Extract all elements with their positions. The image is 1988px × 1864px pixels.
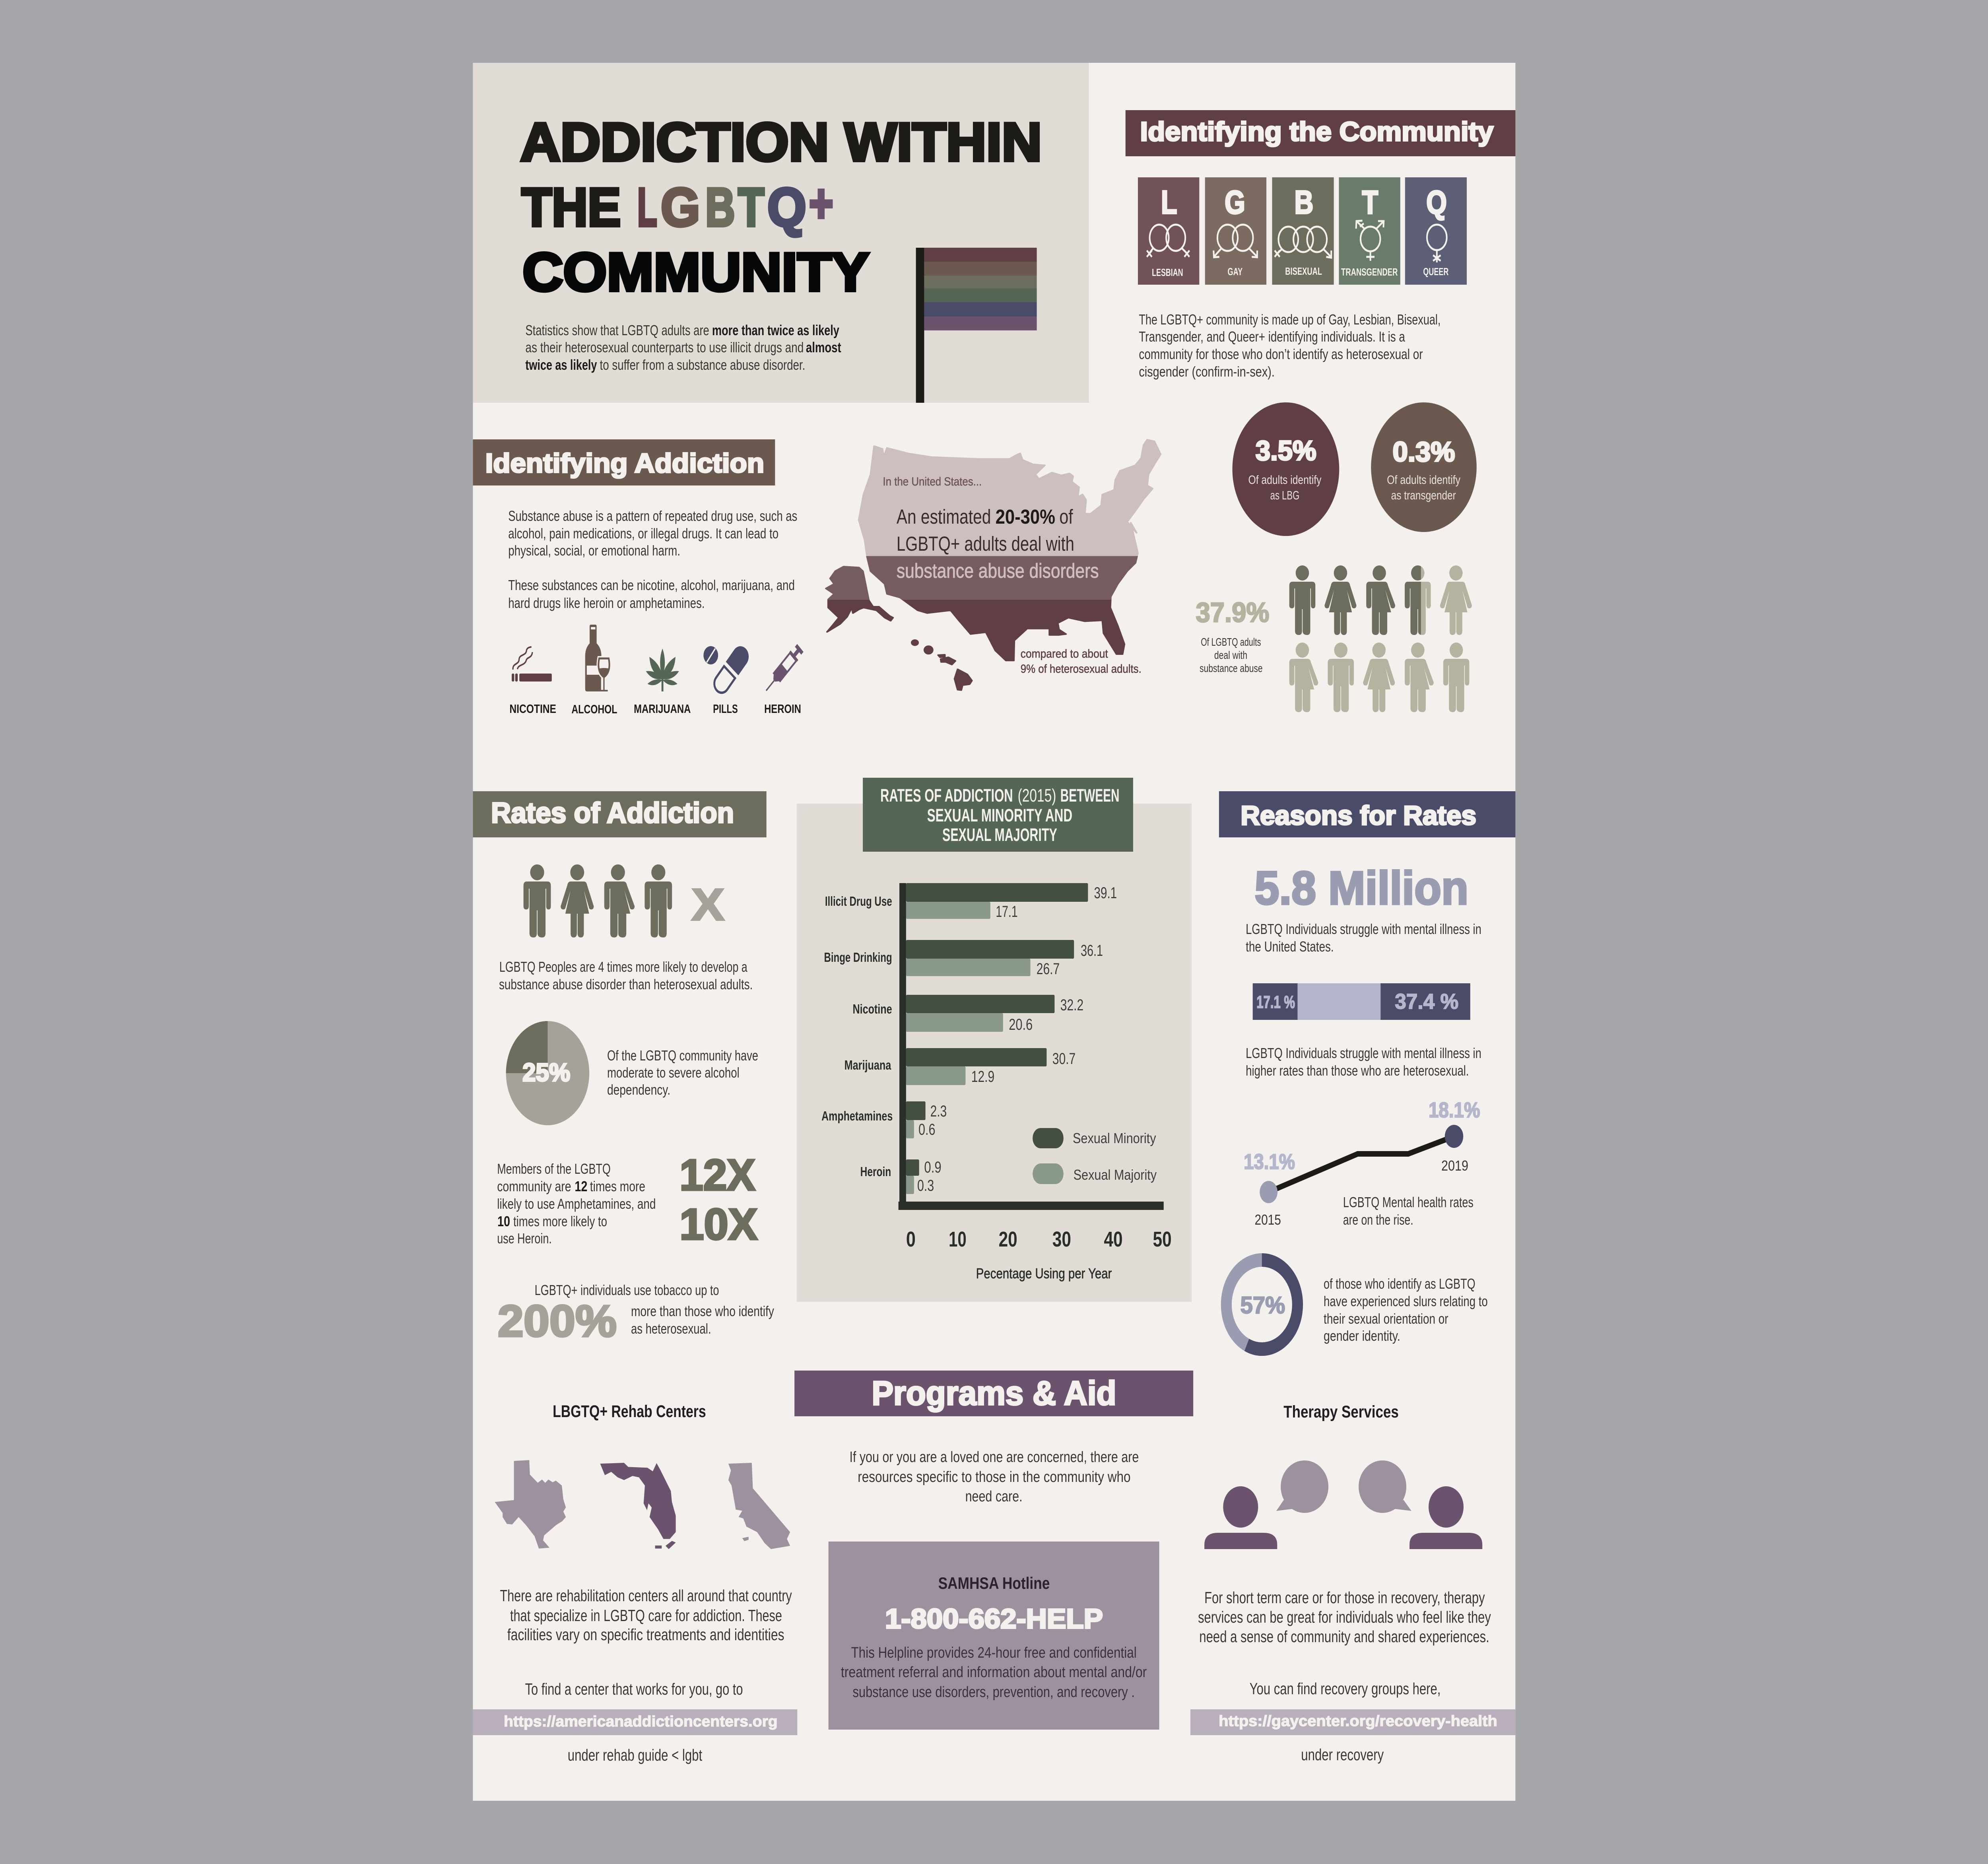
stat: 37.9 percent: substance abuse	[1200, 662, 1262, 675]
stat: 0.3 percent circle: Of adults identify	[1387, 473, 1460, 487]
text: alcohol dependency	[607, 1047, 758, 1098]
tile: queer: QUEER	[1423, 266, 1448, 278]
therapy text	[1198, 1588, 1491, 1698]
axes	[899, 883, 1164, 1210]
comparison bar: 17.1 %	[1256, 992, 1295, 1012]
title	[520, 113, 1042, 303]
stat: 5.8 million	[1246, 862, 1481, 955]
stat: 0.3 percent circle: 0.3%	[1393, 437, 1455, 467]
tile: transgender: T	[1362, 184, 1378, 221]
text: amphetamines and heroin: community are	[497, 1178, 571, 1194]
map text: LGBTQ+ adults deal with	[897, 532, 1074, 555]
text: alcohol dependency: dependency.	[607, 1082, 670, 1098]
heading: LBGTQ+ Rehab Centers	[553, 1402, 706, 1421]
panel: rates of addiction	[473, 791, 774, 1346]
stat: 37.9 percent: deal with	[1214, 649, 1247, 662]
text: amphetamines and heroin: likely to use Amphetamines, and	[497, 1196, 656, 1212]
chart title: SEXUAL MAJORITY	[942, 825, 1057, 845]
icon: pills	[703, 642, 752, 716]
text: slurs: gender identity.	[1324, 1328, 1400, 1344]
tile: lesbian: L	[1161, 184, 1177, 221]
therapy text: You can find recovery groups here,	[1250, 1679, 1441, 1698]
axis ticks: 20	[999, 1228, 1017, 1251]
icon: state maps	[495, 1460, 790, 1549]
callout: hotline	[829, 1542, 1159, 1730]
tile: transgender	[1339, 177, 1400, 285]
therapy text: services can be great for individuals who feel like they	[1198, 1608, 1491, 1626]
tile: bisexual	[1272, 177, 1334, 285]
therapy footer text: under recovery	[1301, 1745, 1384, 1764]
value labels: 0.9	[924, 1158, 942, 1176]
title: THE	[522, 178, 621, 238]
chart title	[863, 778, 1133, 852]
category labels	[821, 894, 893, 1179]
value labels: 30.7	[1052, 1050, 1076, 1068]
chart title: SEXUAL MINORITY AND	[927, 805, 1072, 825]
heading: Identifying the Community	[1140, 116, 1493, 147]
callout: hotline: This Helpline provides 24-hour free and confidential	[851, 1645, 1137, 1661]
addiction text: These substances can be nicotine, alcohol, marijuana, and	[508, 577, 795, 593]
link bar	[1190, 1709, 1515, 1735]
line chart: are on the rise.	[1343, 1212, 1413, 1228]
donut chart: 57 percent: 57%	[1241, 1292, 1285, 1318]
text: slurs: have experienced slurs relating to	[1324, 1293, 1488, 1309]
stat: 12X 10X: 10X	[679, 1200, 757, 1249]
stat: 200 percent	[498, 1282, 774, 1346]
programs text: If you or you are a loved one are concerned, there are	[849, 1449, 1139, 1466]
programs text: resources specific to those in the community who	[858, 1469, 1131, 1485]
icon: nicotine	[509, 647, 556, 716]
tile: gay: GAY	[1228, 266, 1242, 278]
stat: 12X 10X: 12X	[679, 1151, 755, 1200]
addiction text	[508, 508, 797, 611]
comparison bar: 37.4 %	[1395, 990, 1458, 1014]
panel: programs and aid	[794, 1371, 1193, 1730]
legend: Sexual Majority	[1074, 1167, 1157, 1183]
heading: Therapy Services	[1283, 1402, 1399, 1421]
heading: Reasons for Rates	[1241, 800, 1476, 831]
heading: Programs & Aid	[872, 1375, 1116, 1412]
axis ticks: 30	[1052, 1228, 1071, 1251]
chart title: BETWEEN	[1060, 785, 1120, 806]
callout: hotline: treatment referral and information about mental and/or	[841, 1664, 1147, 1681]
text: alcohol dependency: moderate to severe alcohol	[607, 1064, 740, 1081]
axis ticks: 40	[1104, 1228, 1123, 1251]
tile: queer	[1405, 177, 1467, 285]
rehab text: facilities vary on specific treatments and identities	[507, 1625, 784, 1644]
icon: people pictogram	[1289, 565, 1472, 712]
heading	[473, 791, 767, 837]
callout: hotline: 1-800-662-HELP	[885, 1604, 1103, 1634]
rehab text: that specialize in LGBTQ care for addiction. These	[510, 1606, 782, 1625]
heading	[473, 439, 775, 485]
addiction text: alcohol, pain medications, or illegal drugs. It can lead to	[508, 525, 779, 542]
stat: 5.8 million: 5.8 Million	[1254, 862, 1468, 914]
chart title: RATES OF ADDICTION	[880, 785, 1013, 806]
community text: The LGBTQ+ community is made up of Gay, Lesbian, Bisexual,	[1139, 311, 1441, 328]
intro text: to suffer from a substance abuse disorder.	[600, 357, 805, 373]
title: G	[661, 178, 700, 238]
programs text: need care.	[965, 1488, 1023, 1505]
panel: therapy services	[1190, 1402, 1515, 1764]
chart title: (2015)	[1018, 785, 1056, 806]
title: L	[637, 178, 657, 238]
text: amphetamines and heroin: times more likely to	[513, 1213, 607, 1229]
title: B	[705, 178, 735, 238]
value labels: 0.6	[918, 1120, 935, 1138]
map text	[883, 474, 1142, 676]
title: ADDICTION WITHIN	[520, 113, 1042, 173]
panel: rehab centers	[473, 1402, 797, 1764]
addiction text: physical, social, or emotional harm.	[508, 542, 680, 559]
community text	[1139, 311, 1441, 380]
icon: nicotine: NICOTINE	[509, 702, 556, 716]
icon: two people talking	[1204, 1460, 1482, 1549]
value labels	[917, 884, 1117, 1194]
community text: Transgender, and Queer+ identifying individuals. It is a	[1139, 328, 1406, 345]
community text: cisgender (confirm-in-sex).	[1139, 363, 1275, 380]
intro text: as their heterosexual counterparts to use illicit drugs and	[525, 339, 804, 355]
bars	[906, 883, 1088, 1194]
text: higher rates: LGBTQ Individuals struggle with mental illness in	[1246, 1045, 1481, 1061]
tile: bisexual: BISEXUAL	[1285, 266, 1322, 277]
icon: alcohol	[571, 625, 617, 716]
page	[473, 63, 1515, 1801]
axis ticks: 50	[1153, 1228, 1172, 1251]
stat: 5.8 million: the United States.	[1246, 938, 1334, 955]
line chart	[1244, 1099, 1480, 1228]
rehab text: To find a center that works for you, go to	[525, 1680, 743, 1698]
link bar: https://gaycenter.org/recovery-health	[1219, 1713, 1497, 1730]
intro text: Statistics show that LGBTQ adults are	[525, 322, 709, 338]
value labels: 2.3	[930, 1102, 947, 1120]
text: alcohol dependency: Of the LGBTQ community have	[607, 1047, 758, 1064]
stat: 200 percent: LGBTQ+ individuals use tobacco up to	[535, 1282, 719, 1298]
axis ticks	[906, 1228, 1172, 1251]
text: slurs: of those who identify as LGBTQ	[1324, 1276, 1475, 1292]
text: amphetamines and heroin	[497, 1161, 656, 1247]
callout: hotline: SAMHSA Hotline	[938, 1575, 1050, 1593]
text: 4 times: LGBTQ Peoples are 4 times more likely to develop a	[499, 959, 747, 975]
icon: heroin: HEROIN	[764, 702, 801, 716]
map text: An estimated	[897, 505, 991, 528]
tile: bisexual: B	[1295, 184, 1313, 221]
icon: four people times: X	[691, 879, 724, 930]
panel: bar chart	[797, 778, 1192, 1302]
category labels: Heroin	[860, 1165, 891, 1179]
stat: 0.3 percent circle	[1371, 402, 1477, 532]
text: 4 times: substance abuse disorder than heterosexual adults.	[499, 976, 753, 992]
intro text	[525, 322, 841, 373]
community text: community for those who don’t identify as heterosexual or	[1139, 346, 1423, 362]
value labels: 26.7	[1037, 960, 1060, 978]
value labels: 20.6	[1009, 1015, 1033, 1033]
map text: substance abuse disorders	[897, 559, 1099, 582]
legend: Sexual Minority	[1073, 1130, 1156, 1146]
line chart: 13.1%	[1244, 1150, 1295, 1174]
heading	[794, 1371, 1193, 1416]
icon: heroin	[762, 643, 804, 716]
text: 4 times	[499, 959, 753, 992]
value labels: 32.2	[1060, 996, 1083, 1014]
programs text	[849, 1449, 1139, 1505]
text: amphetamines and heroin: Members of the LGBTQ	[497, 1161, 611, 1177]
title: +	[809, 174, 833, 234]
tile: lesbian	[1138, 177, 1199, 285]
map text: compared to about	[1021, 647, 1108, 660]
axis label: Pecentage Using per Year	[976, 1265, 1112, 1282]
category labels: Nicotine	[852, 1002, 892, 1017]
text: higher rates: higher rates than those who are heterosexual.	[1246, 1062, 1469, 1079]
stat: 37.9 percent	[1196, 597, 1269, 675]
text: slurs	[1324, 1276, 1488, 1344]
therapy text: For short term care or for those in recovery, therapy	[1204, 1588, 1485, 1607]
map text: In the United States...	[883, 474, 982, 488]
panel: reasons for rates	[1219, 791, 1515, 1349]
therapy text: need a sense of community and shared experiences.	[1199, 1627, 1489, 1646]
axis ticks: 10	[949, 1228, 967, 1251]
heading: Identifying Addiction	[485, 448, 764, 478]
category labels: Illicit Drug Use	[825, 894, 892, 909]
value labels: 12.9	[971, 1068, 994, 1085]
line chart: 2015	[1254, 1212, 1281, 1228]
callout: hotline: substance use disorders, prevention, and recovery .	[852, 1684, 1135, 1701]
icon: alcohol: ALCOHOL	[571, 702, 617, 716]
text: amphetamines and heroin: use Heroin.	[497, 1230, 552, 1247]
addiction text: hard drugs like heroin or amphetamines.	[508, 595, 705, 611]
intro text: twice as likely	[525, 357, 597, 373]
tile: transgender: TRANSGENDER	[1341, 266, 1398, 278]
comparison bar	[1253, 983, 1470, 1020]
icon: marijuana: MARIJUANA	[634, 702, 691, 716]
title: Q	[767, 178, 806, 238]
stat: 3.5 percent circle: as LBG	[1270, 488, 1299, 502]
text: higher rates	[1246, 1045, 1481, 1079]
title: COMMUNITY	[522, 243, 869, 303]
icon: four people times	[524, 864, 724, 938]
panel: title	[473, 63, 1089, 403]
link bar: https://americanaddictioncenters.org	[504, 1713, 778, 1730]
stat: 3.5 percent circle: Of adults identify	[1248, 473, 1321, 487]
category labels: Marijuana	[845, 1058, 891, 1073]
pie chart: 25 percent	[506, 1021, 589, 1125]
title: T	[738, 178, 764, 238]
rehab footer text: under rehab guide < lgbt	[568, 1746, 703, 1764]
tile: lesbian: LESBIAN	[1152, 267, 1183, 278]
category labels: Amphetamines	[821, 1109, 893, 1124]
rehab text	[500, 1586, 792, 1698]
value labels: 0.3	[917, 1177, 934, 1194]
rehab text: There are rehabilitation centers all around that country	[500, 1586, 792, 1605]
value labels: 39.1	[1094, 884, 1117, 902]
tile: queer: Q	[1426, 184, 1447, 221]
text: amphetamines and heroin: times more	[590, 1178, 645, 1194]
heading	[1126, 110, 1515, 156]
stat: 0.3 percent circle: as transgender	[1391, 488, 1456, 502]
map text: of	[1059, 505, 1073, 528]
stat: 200 percent: as heterosexual.	[631, 1320, 711, 1337]
line chart: LGBTQ Mental health rates	[1343, 1194, 1474, 1210]
map shape	[826, 440, 1161, 690]
heading	[1219, 791, 1515, 837]
heading: Rates of Addiction	[491, 797, 734, 829]
line chart: 2019	[1441, 1157, 1468, 1174]
link bar	[473, 1709, 797, 1735]
stat: 37.9 percent: 37.9%	[1196, 597, 1269, 628]
tile: gay	[1205, 177, 1266, 285]
panel: US map	[826, 440, 1161, 690]
category labels: Binge Drinking	[824, 950, 892, 965]
stat: 200 percent: more than those who identify	[631, 1303, 774, 1319]
map text: 20-30%	[996, 505, 1055, 528]
panel: identifying the community	[1126, 110, 1515, 380]
stat: 37.9 percent: Of LGBTQ adults	[1201, 636, 1261, 649]
stat: 5.8 million: LGBTQ Individuals struggle with mental illness in	[1246, 921, 1481, 937]
value labels: 17.1	[996, 903, 1018, 920]
icon: marijuana	[634, 649, 691, 716]
intro text: more than twice as likely	[712, 322, 839, 338]
pie chart: 25 percent: 25%	[522, 1059, 570, 1087]
line chart: 18.1%	[1429, 1099, 1480, 1122]
value labels: 36.1	[1081, 942, 1103, 959]
stat: 3.5 percent circle: 3.5%	[1256, 435, 1316, 466]
tile: gay: G	[1225, 184, 1245, 221]
legend	[1033, 1128, 1157, 1184]
map text: 9% of heterosexual adults.	[1021, 662, 1142, 676]
text: slurs: their sexual orientation or	[1324, 1311, 1448, 1327]
intro text: almost	[806, 339, 841, 355]
stat: 200 percent: 200%	[498, 1297, 617, 1346]
axis ticks: 0	[906, 1228, 916, 1251]
icon: pills: PILLS	[713, 702, 738, 716]
stat: 12X 10X	[679, 1151, 757, 1249]
stat: 3.5 percent circle	[1233, 402, 1339, 536]
donut chart: 57 percent	[1226, 1260, 1297, 1349]
icon: pride flag	[916, 248, 1037, 403]
addiction text: Substance abuse is a pattern of repeated drug use, such as	[508, 508, 797, 524]
text: amphetamines and heroin: 12	[575, 1178, 587, 1194]
text: amphetamines and heroin: 10	[497, 1213, 510, 1229]
panel: identifying addiction	[473, 439, 804, 716]
